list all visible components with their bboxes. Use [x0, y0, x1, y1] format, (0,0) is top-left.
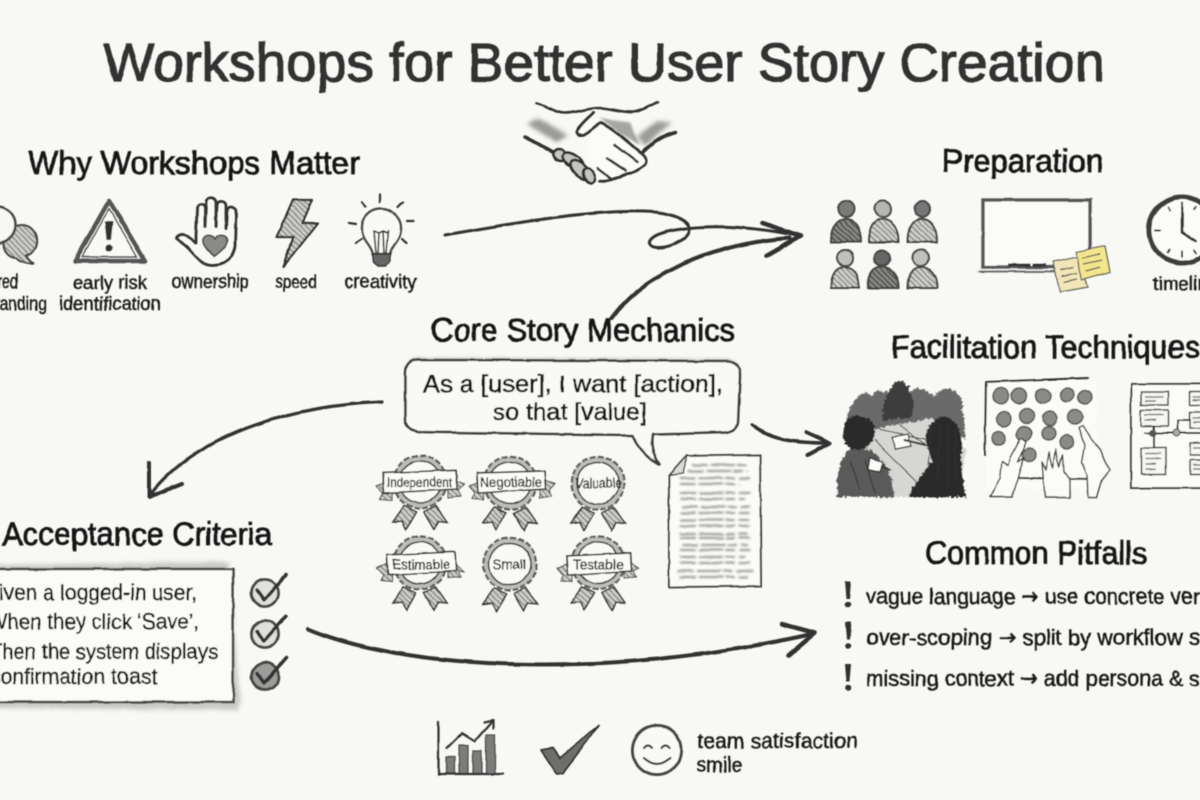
arrow: looped arrow to preparation [445, 211, 801, 318]
badge: Estimable [377, 536, 464, 610]
label: shared understanding [0, 272, 47, 315]
icon: smiley face [632, 726, 682, 774]
panel: core story mechanics [376, 312, 761, 611]
badge: Small: Small [493, 557, 526, 572]
badge: Negotiable [469, 456, 555, 530]
caption: team satisfaction smile [697, 729, 858, 777]
badge: Independent [376, 456, 464, 529]
badge: Testable [557, 536, 639, 610]
label: speed: speed [275, 272, 317, 293]
badge: Valuable [571, 456, 625, 530]
pitfall rows: over-scoping → split by workflow s [866, 625, 1200, 651]
speech bubble: so that [value] [493, 399, 647, 426]
speech bubble: As a [user], I want [action], [423, 371, 723, 398]
icon: rising bar chart [438, 720, 503, 774]
icon: lightning bolt [277, 200, 318, 267]
panel: why workshops matter [0, 145, 417, 315]
icon: handshake [525, 102, 675, 185]
panel: preparation [831, 143, 1200, 295]
icon: check mark [541, 725, 599, 774]
heading: Core Story Mechanics [431, 312, 735, 348]
illustration: card writing discussion [838, 381, 966, 497]
illustration: dot voting board [985, 378, 1110, 497]
icon: document [669, 455, 761, 587]
badge: Estimable: Estimable [392, 557, 450, 572]
arrow: to acceptance criteria [149, 402, 382, 497]
pitfall rows: missing context → add persona & s [866, 666, 1200, 692]
badge: Negotiable: Negotiable [480, 475, 542, 490]
panel: common pitfalls [845, 535, 1200, 692]
badge: Independent: Independent [387, 475, 452, 490]
icon: warning triangle [75, 201, 145, 261]
icon: whiteboard with sticky notes [979, 200, 1110, 292]
label: early risk identification: early risk [73, 273, 147, 294]
icon: three check marks [252, 575, 286, 690]
heading: Preparation [942, 143, 1103, 179]
badge: Small [483, 538, 537, 611]
badge: Valuable: Valuable [575, 476, 622, 491]
heading: Common Pitfalls [925, 535, 1147, 571]
icon: clock [1149, 197, 1200, 263]
arrow: to facilitation techniques [752, 425, 830, 455]
panel: acceptance criteria [0, 516, 286, 710]
heading: Why Workshops Matter [28, 145, 360, 181]
icon: group of people [831, 201, 937, 288]
icon: chat bubbles [0, 206, 37, 263]
label: ownership: ownership [172, 272, 249, 293]
arrow: to common pitfalls [308, 624, 815, 665]
label: early risk identification: identification [59, 294, 161, 315]
label: early risk identification [59, 273, 161, 315]
badge: Testable: Testable [573, 557, 624, 572]
pitfall rows [845, 581, 1200, 692]
icon: light bulb [349, 194, 414, 266]
title: Workshops for Better User Story Creation [103, 33, 1105, 93]
speech bubble [405, 357, 740, 465]
caption: team satisfaction smile: team satisfaction [697, 729, 858, 753]
caption: team satisfaction smile: smile [697, 753, 742, 777]
heading: Acceptance Criteria [2, 516, 272, 552]
criteria box [0, 562, 240, 710]
label: creativity: creativity [344, 272, 417, 293]
panel: facilitation techniques [838, 329, 1200, 497]
icon: hand with heart [177, 198, 236, 265]
illustration: flow chart board [1131, 384, 1200, 488]
outcomes row [438, 720, 858, 777]
